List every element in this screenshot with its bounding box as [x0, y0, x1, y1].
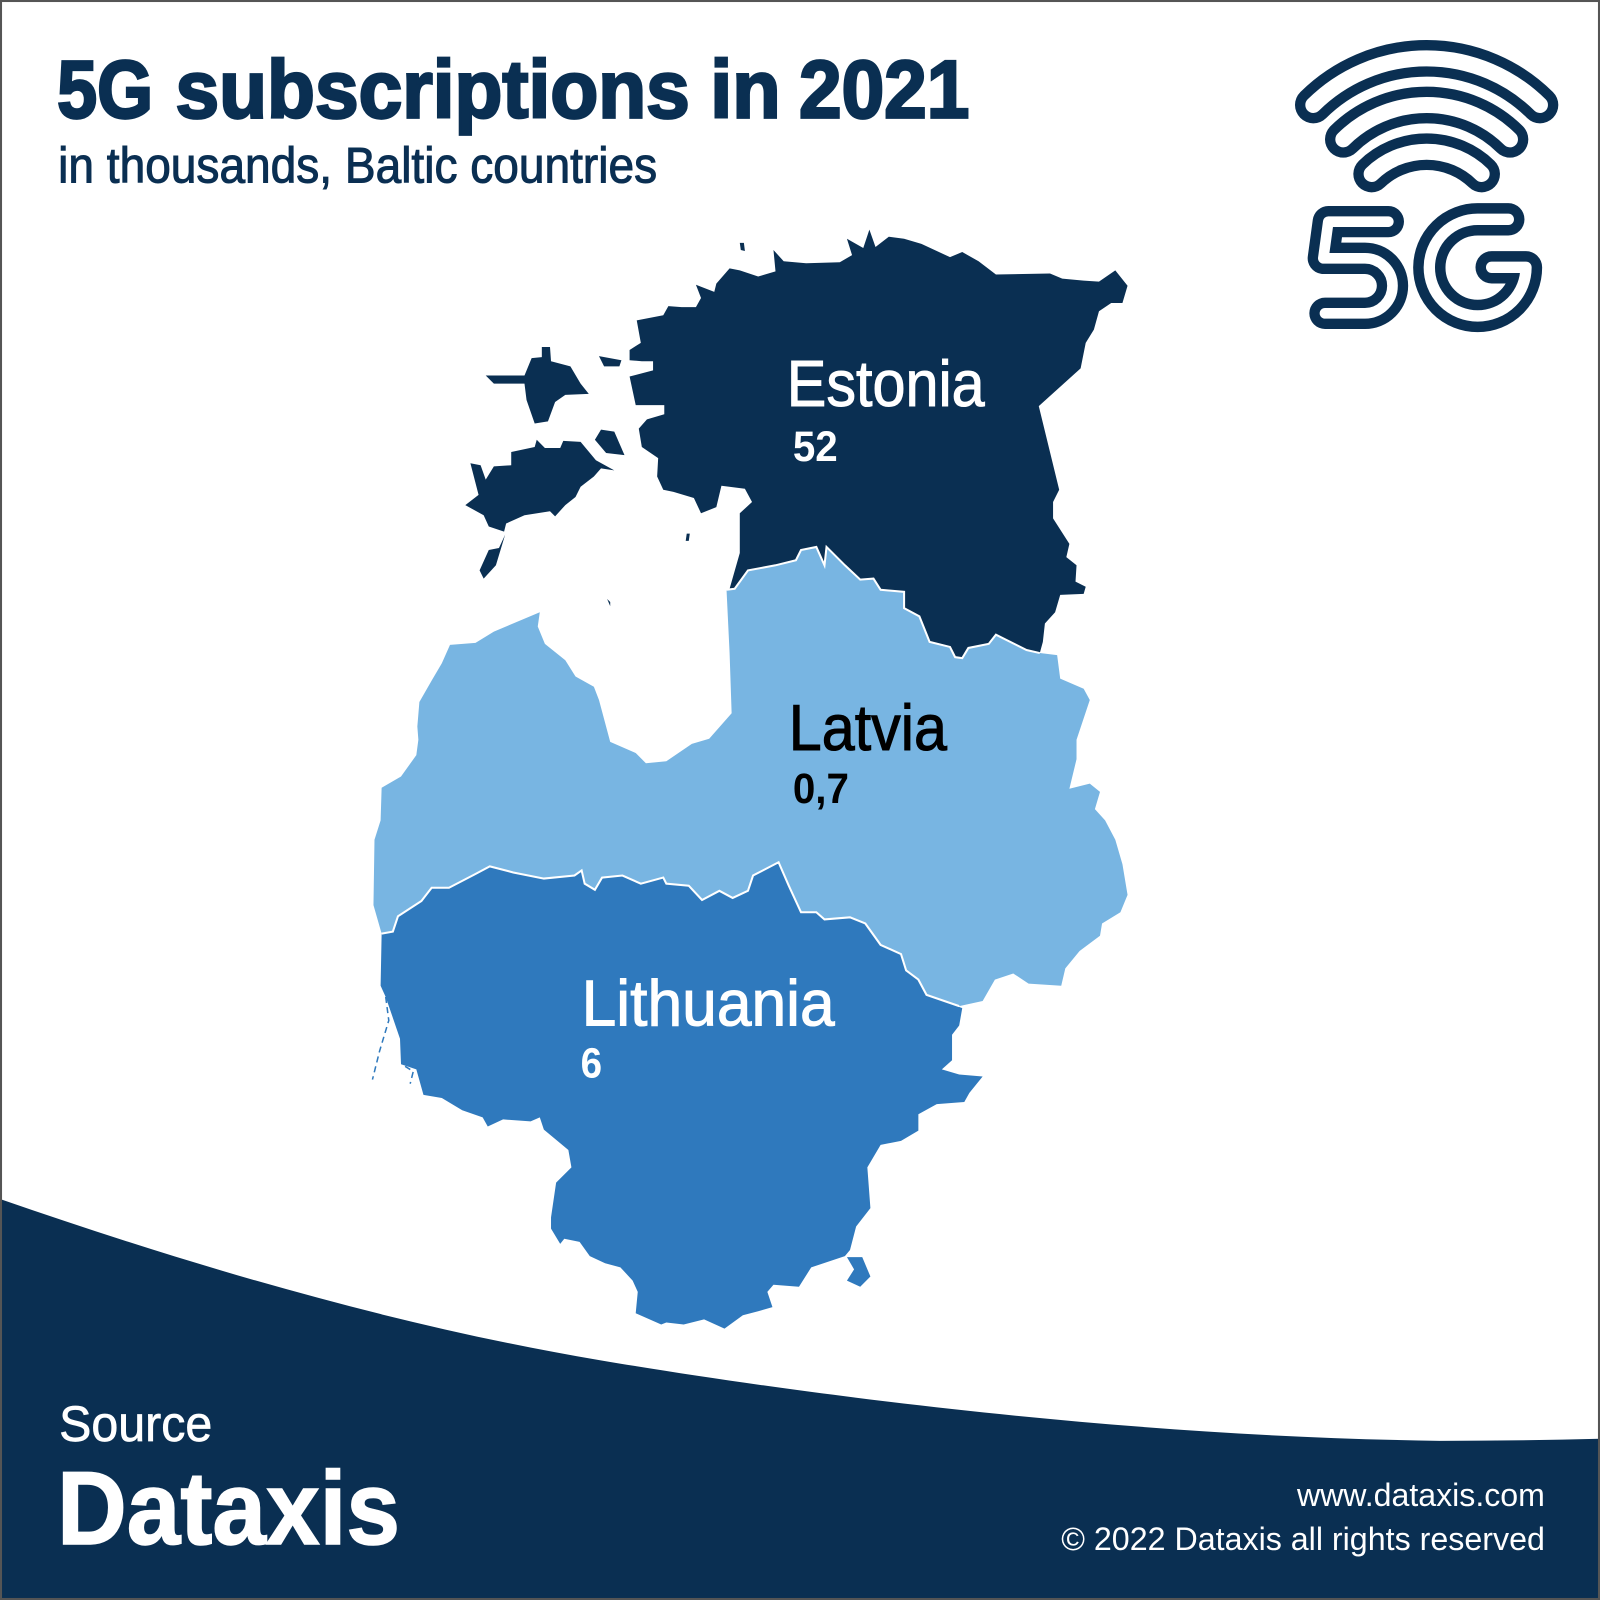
value: Estonia: 52 — [793, 423, 838, 471]
website: www.dataxis.com — [1296, 1476, 1545, 1513]
map: Estonia — [465, 230, 1128, 658]
border: Latvia and Lithuania — [382, 862, 959, 1006]
map: Latvia — [373, 547, 1128, 1006]
source logo: Dataxis: Dataxis — [57, 1451, 400, 1567]
border: Latvia and Estonia — [727, 547, 1040, 658]
copyright: © 2022 Dataxis all rights reserved — [1061, 1520, 1545, 1557]
label: Estonia: Estonia — [787, 347, 985, 420]
icon: 5G wifi signal — [1313, 58, 1540, 316]
title: subscriptions — [176, 44, 690, 135]
label: Latvia: Latvia — [789, 691, 948, 764]
label: Lithuania: Lithuania — [582, 967, 835, 1040]
title: in — [710, 44, 781, 135]
source label: Source — [59, 1396, 212, 1452]
title: 5G — [57, 44, 153, 135]
map: Lithuania — [372, 862, 983, 1329]
value: Latvia: 0,7 — [793, 765, 849, 813]
title: 2021 — [799, 44, 969, 135]
subtitle: in thousands, Baltic countries — [58, 138, 657, 194]
footer band — [0, 1199, 1600, 1600]
value: Lithuania: 6 — [581, 1040, 602, 1088]
title — [57, 44, 969, 135]
